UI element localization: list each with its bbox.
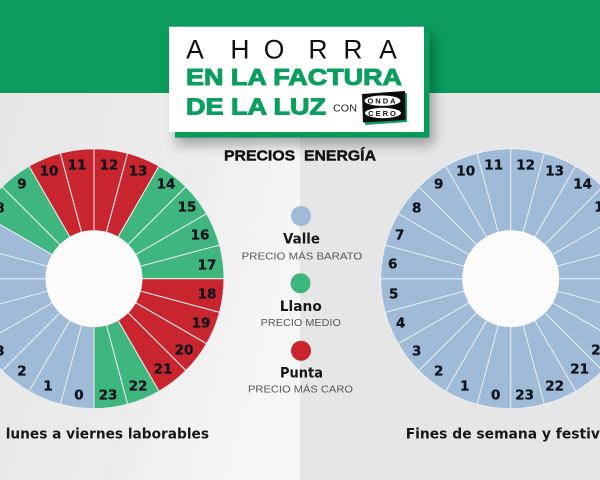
chart: weekend hours wheel: 11	[484, 158, 503, 174]
title word: ahorra: AHORRA	[186, 34, 397, 64]
chart: weekend hours wheel: 10	[456, 164, 475, 180]
legend: llano	[261, 273, 341, 329]
heading: precios energia: PRECIOS ENERGÍA	[224, 148, 377, 165]
chart: weekend hours wheel: 9	[434, 177, 443, 193]
chart: weekday hours wheel: 10	[40, 164, 58, 180]
legend	[242, 206, 362, 396]
chart: weekday hours wheel: 15	[178, 200, 196, 216]
chart: weekend hours wheel: 3	[412, 344, 421, 360]
logo: onda cero: CERO	[368, 109, 398, 118]
chart: weekday hours wheel: 11	[68, 158, 86, 174]
chart: weekday hours wheel: 19	[192, 316, 210, 332]
legend: valle: Valle	[283, 231, 320, 247]
legend: punta: Punta	[280, 366, 323, 382]
title line: en la factura: EN LA FACTURA	[186, 64, 402, 90]
chart: weekday hours wheel: 0	[74, 388, 84, 404]
legend: punta: PRECIO MÁS CARO	[248, 383, 353, 396]
chart: weekend hours wheel: 0	[491, 388, 500, 404]
legend: llano: PRECIO MEDIO	[261, 317, 341, 329]
chart: weekday hours wheel: 17	[198, 258, 216, 274]
chart: weekday hours wheel: 21	[154, 362, 172, 378]
con label: CON	[333, 104, 357, 114]
caption: weekdays: lunes a viernes laborables	[6, 426, 209, 442]
chart: weekday hours wheel: 18	[198, 287, 216, 303]
chart: weekend hours wheel: 13	[545, 164, 564, 180]
chart: weekend hours wheel	[376, 144, 600, 413]
chart: weekend hours wheel: 12	[516, 158, 535, 174]
chart: weekend hours wheel: 21	[570, 362, 589, 378]
logo: onda cero	[362, 91, 407, 125]
chart: weekend hours wheel: 22	[545, 379, 564, 395]
green header band	[0, 0, 600, 93]
chart: weekday hours wheel: 12	[100, 158, 118, 174]
chart: weekday hours wheel: 14	[157, 177, 175, 193]
chart: weekend hours wheel: 8	[412, 201, 421, 217]
chart: weekend hours wheel: 6	[388, 257, 397, 273]
chart: weekday hours wheel: 20	[175, 343, 193, 359]
chart: weekday hours wheel: 13	[129, 164, 147, 180]
title card	[169, 27, 434, 145]
chart: weekday hours wheel: 2	[17, 364, 27, 380]
chart: weekday hours wheel	[0, 144, 228, 413]
legend: llano: Llano	[280, 299, 322, 315]
chart: weekend hours wheel: 7	[395, 228, 404, 244]
chart: weekend hours wheel: 2	[434, 364, 443, 380]
title line: de la luz: DE LA LUZ	[186, 94, 326, 120]
legend: valle: PRECIO MÁS BARATO	[242, 249, 362, 262]
logo: onda cero: ONDA	[367, 96, 398, 106]
chart: weekday hours wheel: 22	[129, 379, 147, 395]
legend: punta	[248, 341, 353, 396]
chart: weekend hours wheel: 5	[389, 287, 398, 303]
chart: weekday hours wheel: 16	[191, 228, 209, 244]
chart: weekend hours wheel: 4	[396, 316, 405, 332]
chart: weekend hours wheel: 14	[573, 177, 592, 193]
chart: weekend hours wheel: 1	[460, 379, 469, 395]
chart: weekend hours wheel: 23	[515, 388, 534, 404]
chart: weekday hours wheel: 1	[43, 379, 53, 395]
legend: valle	[242, 206, 362, 262]
chart: weekday hours wheel: 9	[17, 177, 27, 193]
chart: weekday hours wheel: 23	[99, 388, 117, 404]
